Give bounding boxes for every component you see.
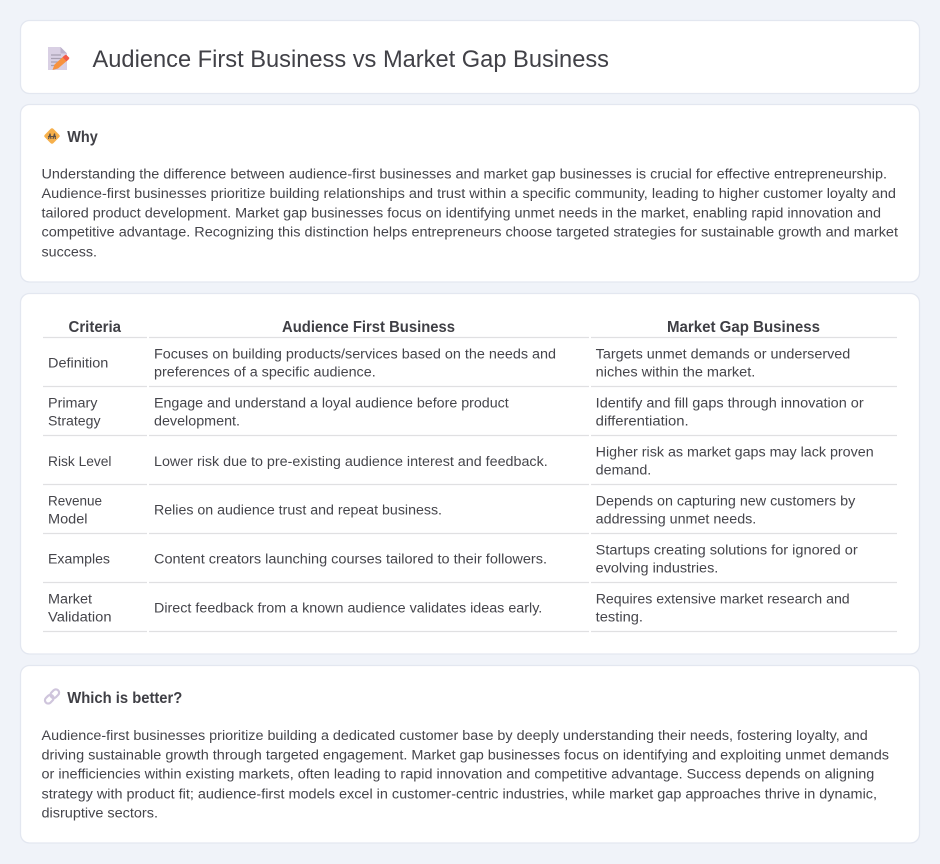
- row: definition: niches within the market.: [596, 364, 755, 380]
- row: revenue model: [43, 494, 897, 534]
- row: definition: Targets unmet demands or underserved: [596, 346, 850, 362]
- icon: memo with pencil: [48, 47, 70, 70]
- row: examples: [43, 542, 897, 582]
- row: risk level: Higher risk as market gaps may lack proven: [596, 444, 874, 460]
- row: revenue model: Relies on audience trust and repeat business.: [154, 502, 442, 518]
- row: primary strategy: Primary: [48, 396, 98, 412]
- heading: which is better: Which is better?: [67, 690, 182, 707]
- row: risk level: Risk Level: [48, 454, 112, 470]
- row: primary strategy: Strategy: [48, 414, 101, 430]
- row: examples: evolving industries.: [596, 560, 718, 576]
- text block: which is better paragraph: or inefficiencies within existing markets, often leading to rapid innovation and competitive advantage. Success depends on aligning: [42, 766, 874, 782]
- panel: title card: [20, 20, 920, 94]
- heading: why: Why: [67, 129, 98, 146]
- row: examples: Content creators launching courses tailored to their followers.: [154, 552, 547, 568]
- row: revenue model: Model: [48, 512, 88, 528]
- row: market validation: Market: [48, 592, 92, 608]
- row: risk level: [43, 444, 897, 484]
- row: definition: preferences of a specific audience.: [154, 364, 376, 380]
- row: primary strategy: [43, 396, 897, 436]
- table header: Criteria: [68, 319, 121, 336]
- text block: which is better paragraph: [42, 728, 889, 822]
- icon: chain link: [44, 688, 60, 705]
- row: revenue model: Revenue: [48, 494, 102, 510]
- title: Audience First Business vs Market Gap Business: [92, 46, 609, 73]
- row: primary strategy: Identify and fill gaps through innovation or: [596, 396, 864, 412]
- text block: why paragraph: tailored product development. Market gap businesses focus on identifying unmet needs in the market, enabling rapid innovation and: [42, 206, 881, 222]
- table header: Market Gap Business: [667, 319, 820, 336]
- row: definition: [43, 346, 897, 386]
- row: risk level: demand.: [596, 462, 651, 478]
- text block: which is better paragraph: disruptive sectors.: [42, 806, 158, 822]
- table header: [43, 319, 897, 338]
- text block: which is better paragraph: strategy with product fit; audience-first models excel in customer-centric industries, while market gap approaches thrive in dynamic,: [42, 786, 877, 802]
- row: examples: Examples: [48, 552, 110, 568]
- panel: why: [20, 104, 920, 282]
- row: market validation: Requires extensive market research and: [596, 592, 850, 608]
- row: risk level: Lower risk due to pre-existing audience interest and feedback.: [154, 454, 548, 470]
- text block: which is better paragraph: driving sustainable growth through targeted engagement. Market gap businesses focus on identifying and exploiting unmet demands: [42, 748, 889, 764]
- text block: why paragraph: success.: [42, 244, 97, 260]
- text block: which is better paragraph: Audience-first businesses prioritize building a dedicated customer base by deeply understanding their needs, fostering loyalty, and: [42, 728, 868, 744]
- panel: which is better: [20, 666, 920, 843]
- row: revenue model: addressing unmet needs.: [596, 512, 756, 528]
- icon: construction diamond: [44, 128, 60, 144]
- row: examples: Startups creating solutions for ignored or: [596, 542, 858, 558]
- row: market validation: [43, 592, 897, 632]
- table header: Audience First Business: [282, 319, 455, 336]
- row: revenue model: Depends on capturing new customers by: [596, 494, 856, 510]
- row: market validation: Direct feedback from a known audience validates ideas early.: [154, 600, 542, 616]
- row: definition: Definition: [48, 356, 108, 372]
- text block: why paragraph: competitive advantage. Recognizing this distinction helps entrepreneurs choose targeted strategies for sustainable growth and market: [42, 224, 898, 240]
- row: primary strategy: Engage and understand a loyal audience before product: [154, 396, 509, 412]
- row: market validation: testing.: [596, 610, 643, 626]
- row: definition: Focuses on building products/services based on the needs and: [154, 346, 556, 362]
- text block: why paragraph: [42, 166, 898, 260]
- text block: why paragraph: Understanding the difference between audience-first businesses and market gap businesses is crucial for effective entrepreneurship.: [42, 166, 887, 182]
- row: market validation: Validation: [48, 610, 112, 626]
- row: primary strategy: development.: [154, 414, 240, 430]
- panel: comparison table: [20, 294, 920, 654]
- text block: why paragraph: Audience-first businesses prioritize building relationships and trust within a specific community, leading to higher customer loyalty and: [42, 186, 896, 202]
- row: primary strategy: differentiation.: [596, 414, 689, 430]
